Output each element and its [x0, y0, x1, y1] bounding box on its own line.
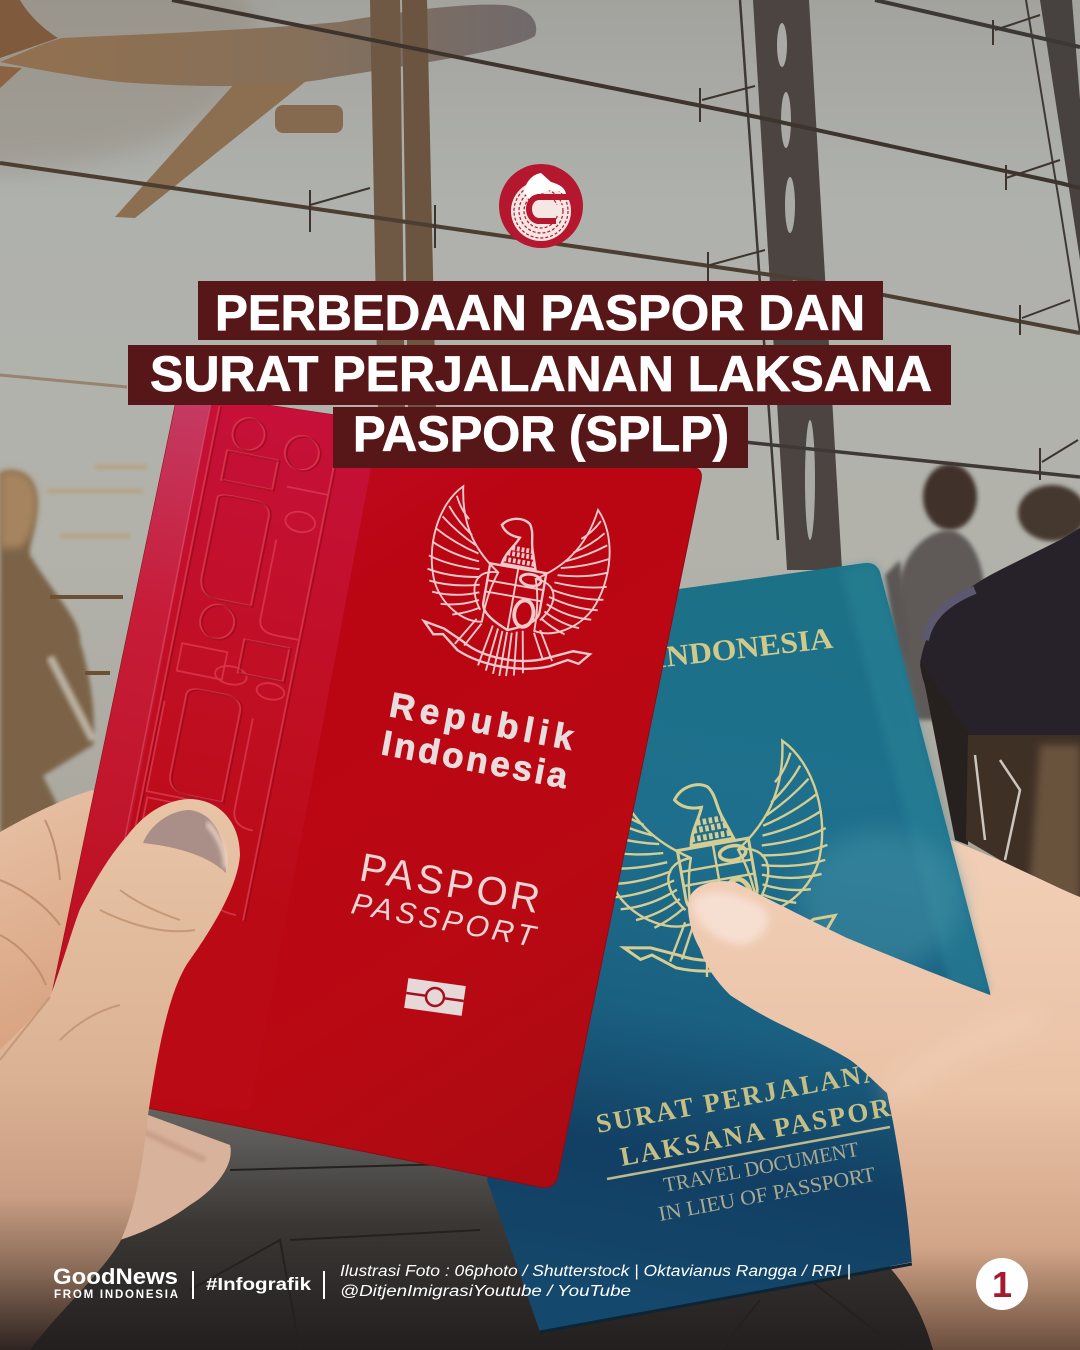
travel document: title text: IN LIEU OF PASSPORT [657, 1162, 877, 1226]
footer: photo credits: @DitjenImigrasiYoutube / YouTube [340, 1283, 631, 1300]
footer: photo credits: Ilustrasi Foto : 06photo / Shutterstock | Oktavianus Rangga / RRI | [340, 1263, 851, 1280]
passport: PASPOR PASSPORT text [349, 846, 543, 954]
icon: biometric chip symbol [404, 978, 466, 1016]
footer: hashtag: #Infografik [206, 1274, 311, 1294]
page number badge [976, 1258, 1028, 1310]
footer: GoodNews brand: FROM INDONESIA [54, 1289, 178, 1301]
passport: Republik Indonesia text: Republik [387, 686, 577, 758]
right hand: palm behind travel document [880, 838, 1080, 1350]
teal travel document (SPLP) [487, 563, 1000, 1332]
left hand: fingers behind passport [0, 790, 231, 1240]
travel document: title text: TRAVEL DOCUMENT [662, 1137, 861, 1197]
passport: national emblem [410, 482, 620, 692]
title: three highlighted lines: SURAT PERJALANAN LAKSANA [150, 346, 932, 402]
title: three highlighted lines [128, 281, 951, 468]
logo: GoodNews garuda badge [499, 164, 583, 248]
travel document: title text [594, 1052, 906, 1226]
blurred people, left [0, 467, 147, 835]
passport: Republik Indonesia text [379, 686, 577, 796]
footer: brand, hashtag and credits [53, 1263, 851, 1301]
travel document: gold emblem [585, 736, 849, 1000]
blurred people, right [885, 464, 1080, 905]
wet floor [0, 1140, 1080, 1350]
passport: embossed pattern band [121, 406, 341, 920]
left hand: thumb over passport [0, 799, 240, 1350]
airplane silhouette [0, 0, 536, 218]
title: three highlighted lines: PASPOR (SPLP) [353, 406, 729, 462]
travel document: INDONESIA label: INDONESIA [652, 622, 835, 675]
passport: PASPOR PASSPORT text: PASSPORT [349, 887, 540, 954]
red passport [33, 392, 701, 1188]
passport: Republik Indonesia text: Indonesia [379, 724, 571, 796]
footer: GoodNews brand: GoodNews [53, 1264, 178, 1289]
passport: PASPOR PASSPORT text: PASPOR [356, 846, 543, 922]
travel document: title text: SURAT PERJALANAN [594, 1052, 906, 1139]
right hand: thumb over travel document [688, 881, 1080, 1350]
page number badge: 1 [992, 1264, 1012, 1305]
footer: photo credits [340, 1263, 851, 1300]
title: three highlighted lines: PERBEDAAN PASPOR DAN [215, 285, 865, 341]
footer: GoodNews brand [53, 1264, 178, 1301]
travel document: title text: LAKSANA PASPOR [618, 1092, 893, 1172]
steel structure: towers and cables [0, 0, 1080, 570]
